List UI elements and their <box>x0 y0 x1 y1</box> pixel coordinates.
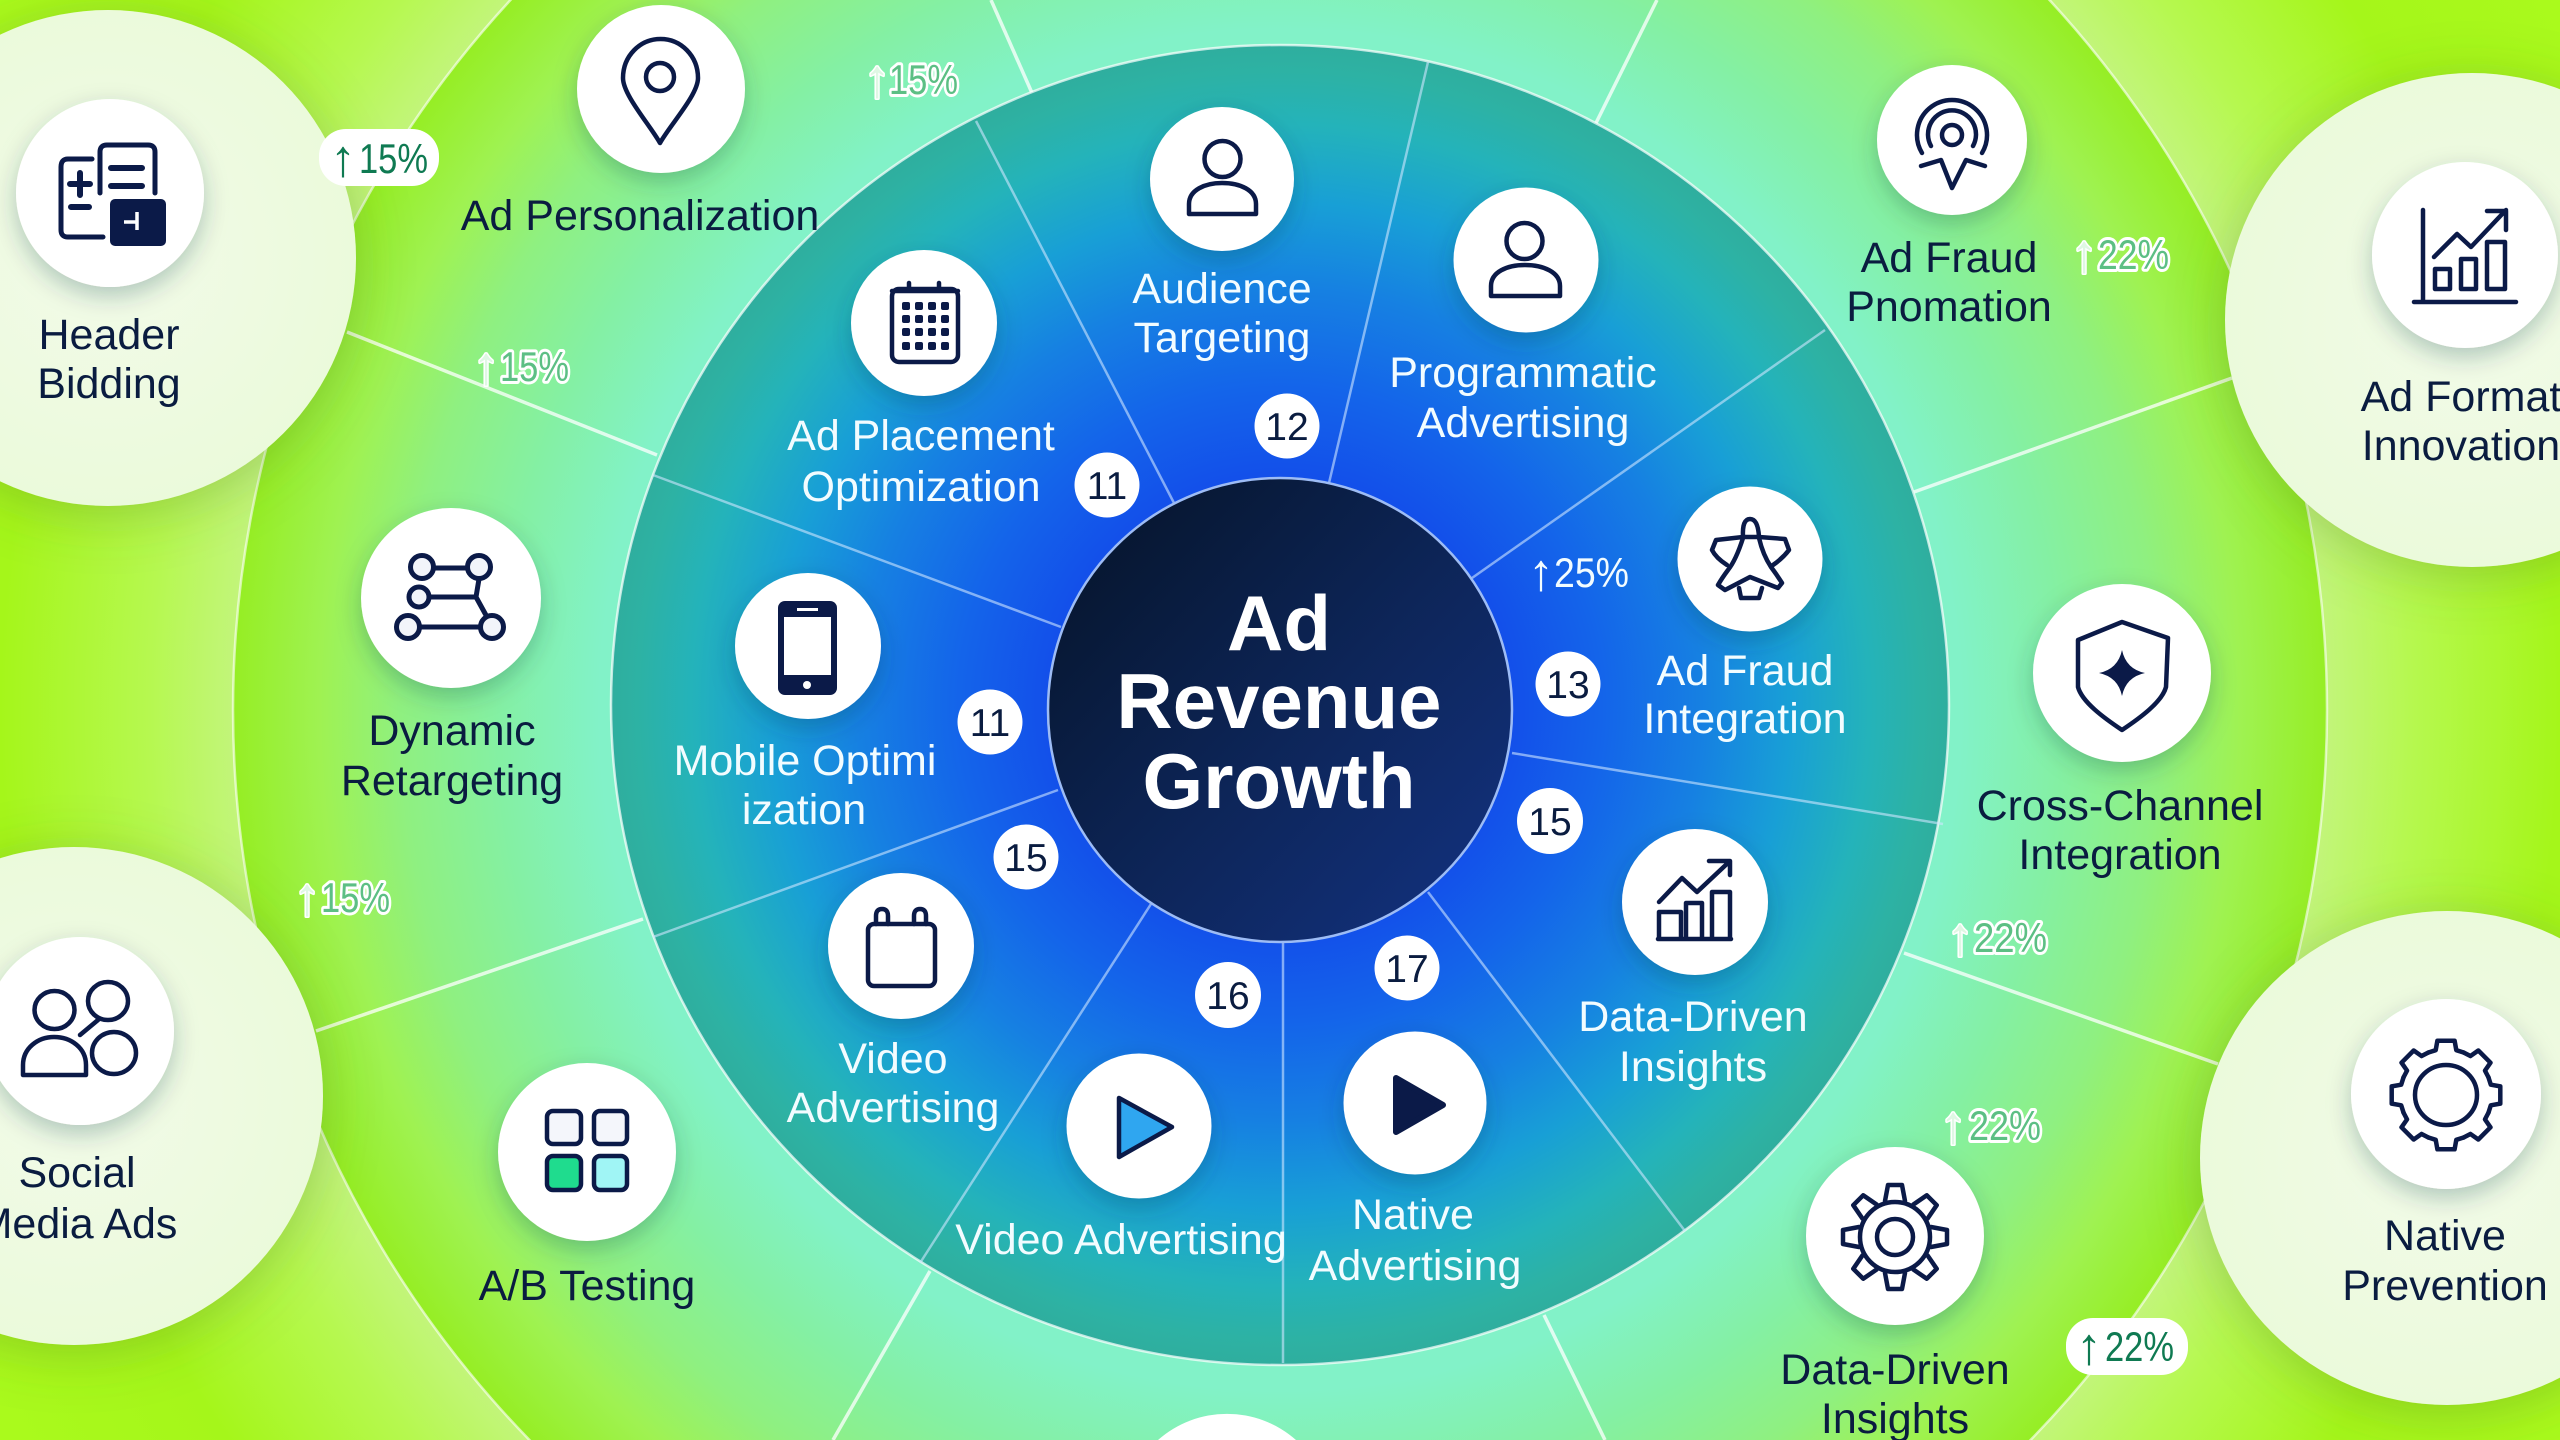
item: Ad Placement Optimization <box>787 250 1055 511</box>
badge: 15 left: 15 <box>1004 837 1048 880</box>
item: Dynamic Retargeting: Dynamic <box>368 707 536 755</box>
item: Data-Driven Insights (outer) <box>1780 1147 2010 1440</box>
growth label: 22 percent top: ↑ <box>2070 224 2098 284</box>
icon: calendar <box>892 283 958 362</box>
icon: bell star <box>1712 519 1789 598</box>
badge: 13 <box>1536 652 1600 716</box>
icon: header bidding documents <box>61 145 166 246</box>
panel: Native Prevention <box>2200 911 2560 1405</box>
badge: 12: 12 <box>1265 406 1309 449</box>
icon: clipboard <box>868 909 935 986</box>
item: Native Advertising: Advertising <box>1309 1242 1521 1290</box>
growth pill: 15 percent: ↑ <box>330 130 356 188</box>
item: Programmatic Advertising: Programmatic <box>1389 349 1657 397</box>
item: Video Advertising (blue play) <box>955 1054 1287 1264</box>
item: Ad Personalization <box>461 5 819 240</box>
item: Mobile Optimization <box>674 573 936 834</box>
badge: 16 <box>1195 962 1261 1028</box>
item: Data-Driven Insights (inner): Data-Driven <box>1578 993 1808 1041</box>
panel: Ad Format Innovation: Ad Format <box>2361 373 2560 421</box>
icon: person <box>1189 141 1256 214</box>
item: Cross-Channel Integration: Integration <box>2018 831 2222 879</box>
item: Ad Personalization: Ad Personalization <box>461 192 819 240</box>
badge: 11 mobile: 11 <box>970 702 1010 745</box>
growth label: 22 percent right <box>1946 907 2047 967</box>
item: Ad Fraud Pnomation: Pnomation <box>1846 283 2052 331</box>
center hub: Ad Revenue Growth: Growth <box>1143 737 1415 825</box>
icon: blue play <box>1119 1098 1172 1157</box>
badge: 13: 13 <box>1546 664 1590 707</box>
growth label: 15 percent lower: ↑ <box>294 867 320 927</box>
panel: Social Media Ads: Social <box>18 1149 136 1197</box>
badge: 11: 11 <box>1087 465 1127 508</box>
growth pill: 22 percent: ↑ <box>2076 1318 2102 1376</box>
growth label: 22 percent right: 22% <box>1974 914 2047 961</box>
badge: 17: 17 <box>1385 948 1429 991</box>
icon: gear <box>2392 1041 2500 1149</box>
growth label: 22 percent top: 22% <box>2098 231 2169 278</box>
icon: cog <box>1843 1185 1947 1289</box>
icon: location pin <box>623 39 698 143</box>
growth label: 15 percent top: ↑ <box>864 49 890 109</box>
growth label: 15 percent mid: ↑ <box>472 336 500 396</box>
panel: Native Prevention: Native <box>2384 1212 2506 1260</box>
growth label: 22 percent top <box>2070 224 2169 284</box>
item: Ad Fraud Pnomation: Ad Fraud <box>1861 234 2037 282</box>
panel: Header Bidding <box>0 10 356 506</box>
item: Data-Driven Insights (inner): Insights <box>1619 1043 1767 1091</box>
badge: 12 <box>1254 394 1320 458</box>
item: Ad Fraud Integration <box>1643 486 1847 743</box>
item: Cross-Channel Integration <box>1977 584 2263 879</box>
growth pill: 22 percent <box>2066 1318 2188 1376</box>
item: Audience Targeting <box>1132 107 1312 362</box>
growth label: white 25 percent <box>1528 544 1629 602</box>
panel: Header Bidding: Header <box>38 311 180 359</box>
growth label: 15 percent top <box>864 49 958 109</box>
item: Video Advertising (calendar) <box>787 873 999 1132</box>
badge: 15 right: 15 <box>1528 801 1572 844</box>
icon: person <box>1491 223 1560 296</box>
item: Programmatic Advertising <box>1389 188 1657 447</box>
center hub: Ad Revenue Growth: Revenue <box>1116 657 1442 745</box>
badge: 17 <box>1374 936 1440 1000</box>
growth label: 22 percent lower <box>1940 1095 2041 1155</box>
item: Video Advertising (calendar): Advertising <box>787 1084 999 1132</box>
growth label: 15 percent lower <box>294 867 390 927</box>
badge: 16: 16 <box>1206 975 1250 1018</box>
item: Dynamic Retargeting <box>341 508 563 805</box>
item: Data-Driven Insights (inner) <box>1578 829 1808 1091</box>
item: Mobile Optimization: Mobile Optimi <box>674 737 936 785</box>
badge: 11 <box>1074 452 1140 518</box>
icon: radar signal <box>1917 100 1987 188</box>
panel: Social Media Ads <box>0 847 323 1345</box>
item: Audience Targeting: Audience <box>1132 265 1312 313</box>
growth pill: 15 percent <box>319 129 439 188</box>
item: Native Advertising: Native <box>1352 1191 1474 1239</box>
item: A/B Testing <box>479 1063 695 1310</box>
growth label: 15 percent lower: 15% <box>321 874 390 921</box>
center hub: Ad Revenue Growth: Ad <box>1227 579 1331 667</box>
item: Ad Placement Optimization: Ad Placement <box>787 412 1055 460</box>
item: Native Advertising <box>1309 1032 1521 1290</box>
growth label: white 25 percent: 25% <box>1554 549 1629 596</box>
center hub: Ad Revenue Growth <box>1048 478 1512 942</box>
item: Data-Driven Insights (outer): Data-Driven <box>1780 1346 2010 1394</box>
growth label: 15 percent mid: 15% <box>500 343 569 390</box>
item: Video Advertising (calendar): Video <box>838 1035 948 1083</box>
item: Video Advertising (blue play): Video Advertising <box>955 1216 1287 1264</box>
growth pill: 15 percent: 15% <box>359 135 428 182</box>
badge: 11 mobile <box>958 690 1022 754</box>
panel: Header Bidding: Bidding <box>37 360 181 408</box>
item: Dynamic Retargeting: Retargeting <box>341 757 563 805</box>
panel: Ad Format Innovation: Innovation <box>2362 422 2560 470</box>
item: Ad Fraud Pnomation <box>1846 65 2052 331</box>
badge: 15 right <box>1517 788 1583 854</box>
icon: smartphone <box>778 601 837 695</box>
growth label: 22 percent lower: ↑ <box>1940 1095 1966 1155</box>
growth pill: 22 percent: 22% <box>2105 1323 2174 1370</box>
badge: 15 left <box>994 824 1058 890</box>
growth label: 22 percent right: ↑ <box>1946 907 1974 967</box>
item: Ad Fraud Integration: Ad Fraud <box>1657 647 1833 695</box>
growth label: 15 percent mid <box>472 336 569 396</box>
icon: dark play <box>1396 1078 1443 1132</box>
panel: Native Prevention: Prevention <box>2342 1262 2548 1310</box>
item: Programmatic Advertising: Advertising <box>1417 399 1629 447</box>
icon: four squares <box>547 1111 627 1190</box>
item: A/B Testing: A/B Testing <box>479 1262 695 1310</box>
icon: shield with star <box>2078 622 2168 730</box>
icon: chart with arrow <box>2414 210 2516 302</box>
item: Ad Placement Optimization: Optimization <box>802 463 1040 511</box>
growth label: 15 percent top: 15% <box>889 56 958 103</box>
growth label: white 25 percent: ↑ <box>1528 544 1554 602</box>
item: Ad Fraud Integration: Integration <box>1643 695 1847 743</box>
icon: growth chart <box>1658 861 1731 939</box>
item: Audience Targeting: Targeting <box>1134 314 1310 362</box>
icon: node network <box>396 556 504 638</box>
icon: people network <box>23 982 136 1075</box>
partial circle at bottom edge <box>1158 1414 1296 1440</box>
item: Cross-Channel Integration: Cross-Channel <box>1977 782 2263 830</box>
middle ring <box>611 45 1949 1365</box>
item: Mobile Optimization: ization <box>742 786 866 834</box>
panel: Ad Format Innovation <box>2225 73 2560 567</box>
growth label: 22 percent lower: 22% <box>1969 1102 2041 1149</box>
